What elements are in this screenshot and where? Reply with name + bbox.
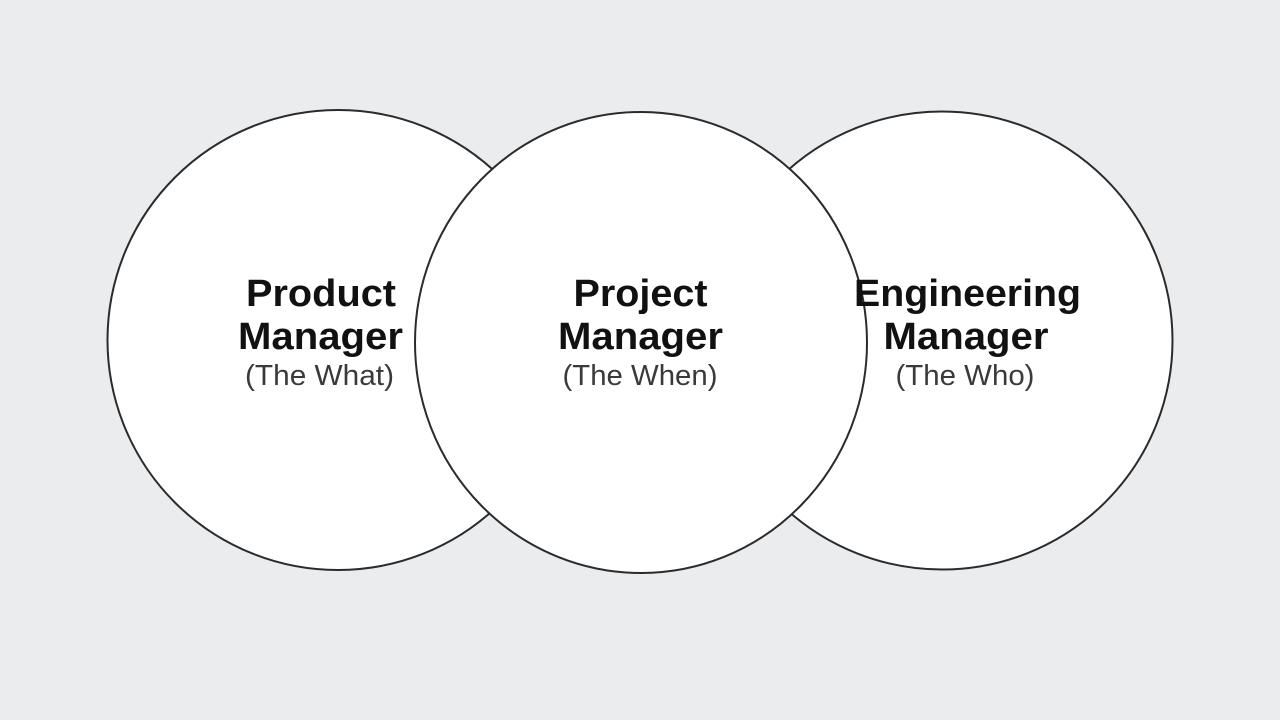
label: project manager: Project: [574, 273, 708, 315]
label: engineering manager: (The Who): [896, 360, 1034, 392]
circle: product manager: [108, 110, 568, 570]
label: project manager: Manager: [558, 316, 723, 358]
circle: project manager: [415, 112, 867, 573]
label: project manager: (The When): [562, 360, 718, 392]
label: product manager: Product: [246, 273, 396, 315]
label: product manager: [238, 273, 403, 392]
circle: engineering manager: [712, 112, 1172, 570]
label: product manager: Manager: [238, 316, 403, 358]
label: engineering manager: Engineering: [854, 273, 1081, 315]
label: product manager: (The What): [245, 360, 394, 392]
label: project manager: [558, 273, 723, 392]
label: engineering manager: Manager: [884, 316, 1049, 358]
label: engineering manager: [854, 273, 1081, 392]
